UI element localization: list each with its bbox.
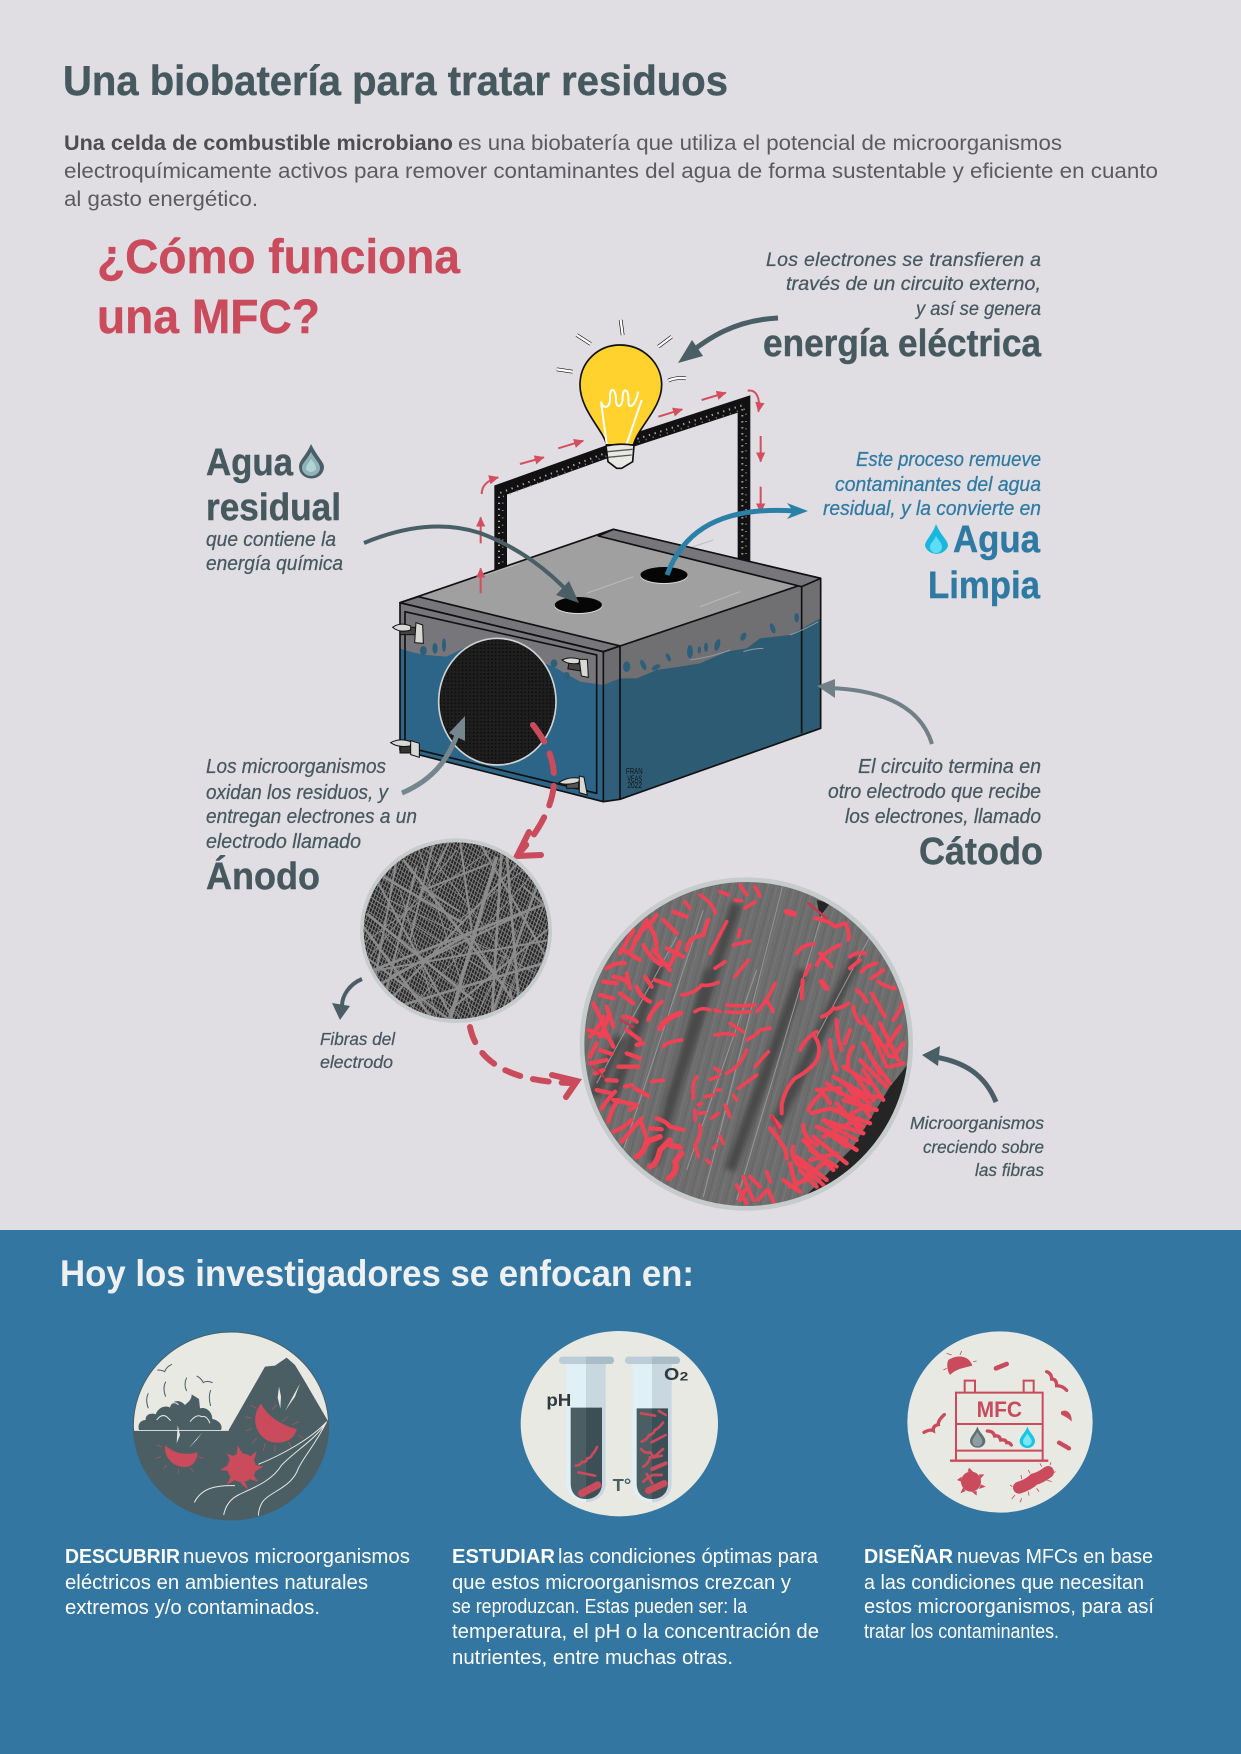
icon: study tubes	[521, 1331, 718, 1516]
text: descubrir: eléctricos en ambientes naturales	[65, 1571, 368, 1594]
text: disenar: tratar los contaminantes.	[864, 1620, 1059, 1643]
label: microorganismos creciendo: las fibras	[975, 1160, 1044, 1180]
arrow: to cathode	[817, 679, 932, 744]
icon: study tubes: T°	[613, 1475, 631, 1495]
circuit current arrows	[481, 391, 761, 593]
test tube right	[625, 1357, 680, 1502]
heading: como funciona	[97, 231, 460, 344]
callout: anodo	[206, 756, 417, 898]
callout: catodo: los electrones, llamado	[845, 806, 1041, 828]
battery box: VEAS	[627, 774, 642, 783]
icon: study tubes: pH	[546, 1390, 571, 1410]
icon: wing nuts	[391, 623, 588, 795]
text: descubrir	[65, 1545, 410, 1619]
icon: design MFC	[907, 1331, 1093, 1513]
callout: agua limpia: contaminantes del agua	[835, 474, 1041, 496]
text: disenar: estos microorganismos, para así	[864, 1595, 1154, 1618]
label: fibras del electrodo: electrodo	[320, 1052, 393, 1072]
text: descubrir: extremos y/o contaminados.	[65, 1596, 320, 1619]
icon: dirty water drop	[299, 444, 324, 478]
battery box	[400, 529, 821, 802]
intro paragraph	[64, 131, 1158, 211]
callout: catodo: Cátodo	[919, 831, 1043, 873]
intro paragraph: electroquímicamente activos para remover contaminantes del agua de forma sustentable y eficiente en cuanto	[64, 159, 1158, 183]
text: disenar: DISEÑAR	[864, 1545, 953, 1568]
callout: agua residual	[206, 442, 343, 575]
battery box: FRAN	[626, 767, 643, 776]
icon: light bulb	[557, 320, 686, 468]
text: disenar	[864, 1545, 1154, 1643]
callout: anodo: Los microorganismos	[206, 756, 386, 778]
arrow: waste water into hole	[364, 526, 579, 603]
dashed arrow: anode to fibres	[517, 725, 554, 856]
arrow: clean water out	[667, 503, 808, 575]
callout: agua residual: residual	[206, 487, 341, 529]
heading: como funciona: ¿Cómo funciona	[97, 231, 460, 284]
panel: researchers focus	[0, 1230, 1241, 1754]
intro paragraph: al gasto energético.	[64, 187, 258, 211]
text: disenar: nuevas MFCs en base	[957, 1545, 1153, 1568]
callout: catodo	[828, 756, 1043, 873]
heading: como funciona: una MFC?	[97, 291, 320, 344]
text: estudiar: las condiciones óptimas para	[558, 1545, 819, 1568]
text: estudiar: que estos microorganismos crezcan y	[452, 1571, 792, 1594]
text: estudiar: temperatura, el pH o la concentración de	[452, 1620, 819, 1643]
callout: catodo: otro electrodo que recibe	[828, 781, 1041, 803]
arrow: to bulb	[678, 318, 778, 363]
text: descubrir: nuevos microorganismos	[183, 1545, 410, 1568]
callout: energia electrica	[763, 249, 1042, 365]
icon: design MFC: MFC	[977, 1397, 1022, 1422]
text: descubrir: DESCUBRIR	[65, 1545, 180, 1568]
anode lens	[439, 638, 556, 765]
callout: agua limpia: Este proceso remueve	[856, 449, 1041, 471]
callout: anodo: electrodo llamado	[206, 831, 361, 853]
callout: anodo: Ánodo	[206, 854, 320, 898]
text: estudiar: se reproduzcan. Estas pueden ser: la	[452, 1595, 748, 1618]
test tube left	[559, 1357, 614, 1502]
callout: agua limpia: Limpia	[928, 565, 1041, 607]
icon: study tubes: 2	[680, 1369, 689, 1383]
icon: discover	[125, 1332, 338, 1525]
label: fibras del electrodo: Fibras del	[320, 1029, 396, 1049]
title: Una biobatería para tratar residuos	[63, 57, 728, 104]
text: disenar: a las condiciones que necesitan	[864, 1571, 1144, 1594]
callout: agua residual: Agua	[206, 442, 294, 484]
dashed arrow: fibres to microorganisms	[470, 1027, 577, 1097]
battery box: 2022	[627, 781, 642, 790]
label: fibras del electrodo	[320, 979, 396, 1072]
arrow: to anode	[402, 716, 465, 793]
callout: agua limpia: Agua	[953, 519, 1041, 561]
callout: agua residual: que contiene la	[206, 529, 336, 551]
intro paragraph: es una biobatería que utiliza el potencial de microorganismos	[458, 131, 1062, 155]
illustration: MFC box with bulb and circuit	[391, 320, 821, 802]
label: microorganismos creciendo: creciendo sobre	[923, 1137, 1044, 1157]
icon: study tubes: O	[664, 1364, 679, 1384]
circuit wire	[499, 404, 746, 633]
callout: agua residual: energía química	[206, 553, 343, 575]
battery outline	[950, 1381, 1048, 1461]
text: estudiar: ESTUDIAR	[452, 1545, 555, 1568]
callout: anodo: oxidan los residuos, y	[206, 782, 389, 804]
callout: energia electrica: energía eléctrica	[763, 323, 1042, 365]
label: microorganismos creciendo: Microorganismos	[910, 1113, 1044, 1133]
callout: energia electrica: Los electrones se transfieren a	[766, 249, 1041, 271]
circle: microorganisms on fibres	[580, 878, 913, 1210]
callout: catodo: El circuito termina en	[858, 756, 1041, 778]
callout: agua limpia: residual, y la convierte en	[823, 498, 1041, 520]
icon: clean water drop	[925, 524, 948, 554]
callout: anodo: entregan electrones a un	[206, 806, 417, 828]
callout: agua limpia	[823, 449, 1041, 607]
text: estudiar	[452, 1545, 819, 1669]
callout: energia electrica: y así se genera	[914, 298, 1041, 320]
text: estudiar: nutrientes, entre muchas otras.	[452, 1646, 733, 1669]
intro paragraph: Una celda de combustible microbiano	[64, 131, 453, 155]
heading: hoy los investigadores: Hoy los investigadores se enfocan en:	[60, 1253, 694, 1294]
circle: electrode fibres	[360, 838, 552, 1023]
callout: energia electrica: través de un circuito externo,	[786, 273, 1041, 295]
label: microorganismos creciendo	[910, 1046, 1044, 1180]
